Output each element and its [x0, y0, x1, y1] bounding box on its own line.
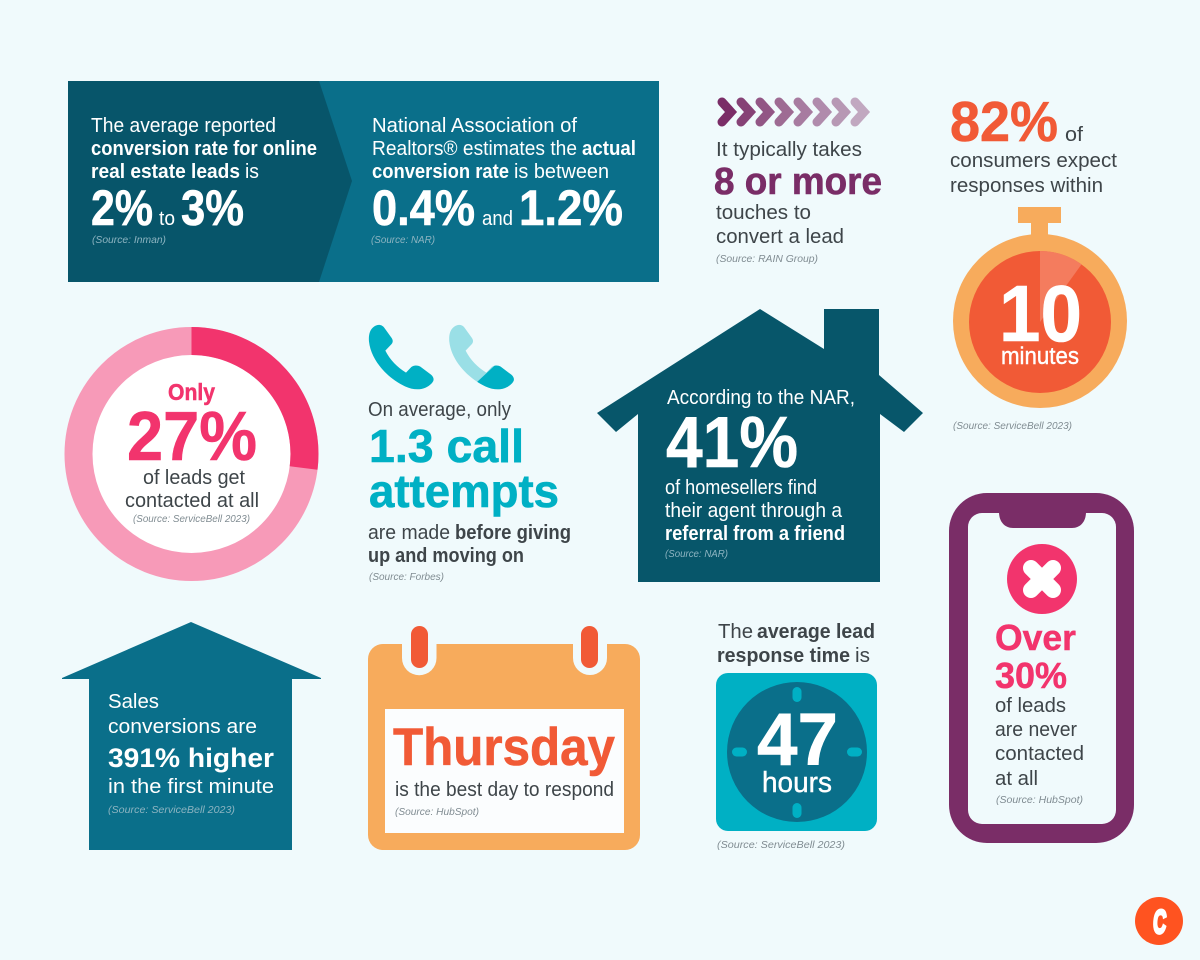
text: actual conversion rate: 0.4% — [372, 180, 475, 236]
icon: phone frame — [949, 493, 1134, 843]
text: call attempts statement: before giving — [455, 522, 571, 544]
icon: calendar ring right — [581, 626, 598, 668]
text: over 30 percent statement: of leads — [995, 695, 1066, 717]
text: touches statement: convert a lead — [716, 226, 844, 248]
text: donut label: 27% — [127, 397, 257, 475]
text: reported conversion rate: conversion rate for online — [91, 138, 317, 160]
text: referral statement — [665, 387, 855, 560]
text: reported conversion rate: real estate leads — [91, 161, 240, 183]
text: over 30 percent statement: are never — [995, 719, 1077, 741]
calendar page — [385, 709, 624, 833]
text: touches statement: It typically takes — [716, 139, 862, 161]
text: actual conversion rate: National Association of — [372, 115, 577, 137]
panel: smartphone never contacted — [949, 493, 1134, 843]
text: Thursday statement — [393, 718, 615, 818]
text: donut label: of leads get — [143, 467, 245, 489]
text: actual conversion rate: is between — [514, 161, 609, 183]
icon: stopwatch: minutes — [1001, 343, 1079, 370]
text: referral statement: their agent through a — [665, 500, 843, 522]
source: stopwatch: (Source: ServiceBell 2023) — [953, 420, 1072, 432]
source: clock: (Source: ServiceBell 2023) — [717, 839, 845, 851]
icon: dark phone handset — [369, 325, 434, 389]
text: call attempts statement: attempts — [369, 465, 559, 517]
text: referral statement: of homesellers find — [665, 477, 817, 499]
text: 82 percent of consumers: 82% — [950, 90, 1058, 154]
panel: calendar Thursday — [368, 626, 640, 850]
text: actual conversion rate: (Source: NAR) — [371, 234, 435, 246]
text: Thursday statement: (Source: HubSpot) — [395, 806, 479, 818]
text: over 30 percent statement: (Source: HubSpot) — [996, 794, 1083, 806]
panel: up arrow sales conversions — [62, 622, 321, 850]
text: over 30 percent statement: at all — [995, 768, 1038, 790]
text: Thursday statement: Thursday — [393, 718, 615, 777]
icon: calendar body — [368, 644, 640, 850]
text: reported conversion rate: to — [159, 208, 175, 230]
panel: call attempts — [368, 325, 571, 583]
text: touches statement — [714, 139, 882, 265]
text: sales conversions statement: (Source: ServiceBell 2023) — [108, 804, 235, 816]
text: call attempts statement: are made — [368, 522, 450, 544]
text: donut label: Only — [168, 379, 215, 405]
text: average lead response heading: is — [855, 645, 870, 667]
banner right background — [68, 81, 659, 282]
text: over 30 percent statement — [995, 617, 1084, 806]
panel: conversion rate banner — [68, 81, 659, 282]
icon: X in circle — [1007, 544, 1077, 614]
text: 82 percent of consumers: responses within — [950, 175, 1103, 197]
text: touches statement: touches to — [716, 202, 811, 224]
logo: C — [1152, 904, 1168, 941]
text: reported conversion rate: The average reported — [91, 115, 276, 137]
panel: house referral — [597, 309, 923, 582]
text: average lead response heading — [717, 621, 875, 667]
text: actual conversion rate: conversion rate — [372, 161, 509, 183]
text: reported conversion rate: 3% — [181, 180, 244, 236]
icon: calendar notch left — [402, 640, 436, 675]
text: reported conversion rate: (Source: Inman) — [92, 234, 166, 246]
text: over 30 percent statement: contacted — [995, 743, 1084, 765]
icon: stopwatch: 10 — [999, 269, 1082, 358]
icon: partly filled phone handset — [449, 325, 514, 389]
text: actual conversion rate: and — [482, 208, 513, 230]
text: sales conversions statement: conversions are — [108, 716, 257, 738]
phone screen — [968, 513, 1116, 824]
text: reported conversion rate: is — [245, 161, 259, 183]
text: over 30 percent statement: 30% — [995, 655, 1067, 696]
text: 82 percent of consumers — [950, 90, 1117, 197]
text: sales conversions statement: 391% higher — [108, 743, 275, 773]
text: reported conversion rate: 2% — [91, 180, 153, 236]
panel: average response time — [716, 621, 877, 851]
text: sales conversions statement — [108, 691, 275, 816]
icon: clock — [716, 673, 877, 831]
text: 82 percent of consumers: of — [1065, 124, 1083, 146]
text: referral statement: (Source: NAR) — [665, 548, 728, 560]
text: 82 percent of consumers: consumers expect — [950, 150, 1117, 172]
icon: up arrow shape — [62, 622, 321, 850]
panel: touches to convert — [714, 102, 882, 265]
text: average lead response heading: average lead — [757, 621, 875, 643]
text: donut label: (Source: ServiceBell 2023) — [133, 513, 250, 525]
icon: clock: hours — [762, 767, 832, 799]
text: touches statement: 8 or more — [714, 161, 882, 203]
text: over 30 percent statement: Over — [995, 617, 1076, 658]
text: referral statement: referral from a friend — [665, 523, 845, 545]
phone notch — [999, 512, 1086, 528]
text: average lead response heading: The — [718, 621, 753, 643]
logo — [1135, 897, 1183, 945]
text: actual conversion rate: Realtors® estimates the — [372, 138, 577, 160]
text: sales conversions statement: in the first minute — [108, 776, 274, 798]
text: call attempts statement — [368, 399, 571, 583]
icon: calendar notch right — [573, 640, 607, 675]
text: sales conversions statement: Sales — [108, 691, 159, 713]
text: Thursday statement: is the best day to respond — [395, 779, 614, 801]
text: call attempts statement: 1.3 call — [369, 420, 524, 472]
icon: house shape — [597, 309, 923, 582]
text: call attempts statement: up and moving on — [368, 545, 524, 567]
text: actual conversion rate: actual — [582, 138, 636, 160]
text: donut label — [125, 379, 259, 525]
text: referral statement: 41% — [666, 403, 798, 483]
text: call attempts statement: (Source: Forbes) — [369, 571, 444, 583]
text: touches statement: (Source: RAIN Group) — [716, 253, 818, 265]
text: actual conversion rate — [371, 115, 636, 246]
icon: row of chevrons — [722, 102, 864, 122]
panel: 82 percent expect response — [950, 90, 1127, 432]
text: average lead response heading: response time — [717, 645, 850, 667]
text: referral statement: According to the NAR, — [667, 387, 855, 409]
banner left arrow background — [68, 81, 352, 282]
icon: stopwatch — [953, 207, 1127, 408]
text: call attempts statement: On average, only — [368, 399, 511, 421]
text: donut label: contacted at all — [125, 490, 259, 512]
text: reported conversion rate — [91, 115, 317, 246]
panel: donut 27 percent — [78, 341, 304, 567]
chart: donut ring — [78, 341, 304, 567]
icon: calendar ring left — [411, 626, 428, 668]
text: actual conversion rate: 1.2% — [519, 180, 623, 236]
icon: clock: 47 — [757, 698, 838, 781]
